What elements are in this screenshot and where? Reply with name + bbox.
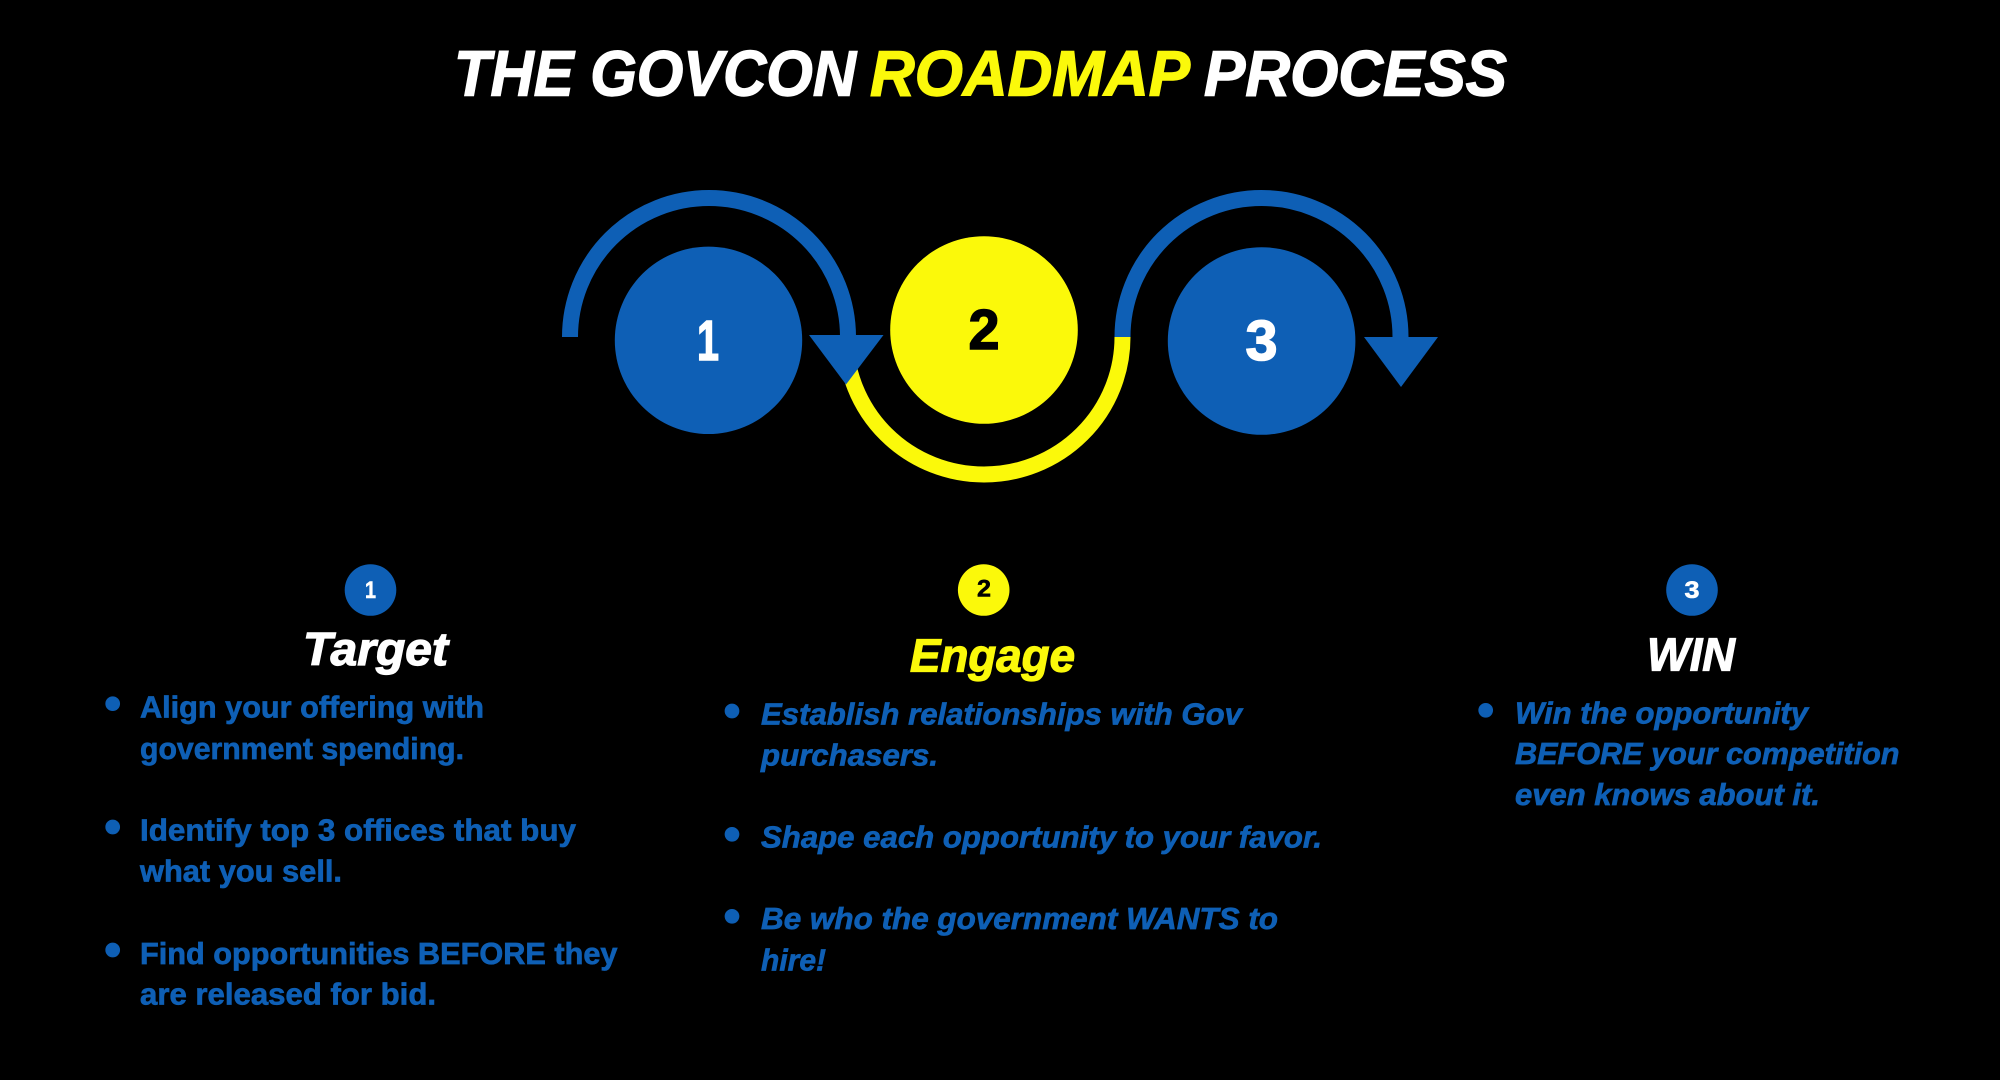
badge 3 [1666,564,1718,616]
bullet list: target: Identify top 3 offices that buy [140,813,577,848]
badge 2 [958,564,1010,616]
heading: target: Target [303,623,450,675]
step 2 circle: 2 [968,298,1000,362]
arc: yellow arc to step 3 [846,337,1122,474]
bullet list: engage: Establish relationships with Gov [761,696,1244,731]
title: ROADMAP [870,38,1190,110]
badge 2: 2 [977,576,991,602]
bullet list: win: even knows about it. [1515,777,1820,812]
arrow: step 3 onward [1122,198,1438,387]
bullet list: engage: Be who the government WANTS to [761,901,1278,936]
bullet list: target [106,690,618,1012]
bullet list: win: Win the opportunity [1515,695,1810,730]
step 1 circle: 1 [697,309,719,373]
step 2 circle [890,236,1078,424]
badge 1 [345,564,396,616]
bullet list: win [1479,695,1900,812]
heading: engage: Engage [910,630,1075,682]
bullet list: engage: Shape each opportunity to your favor. [761,819,1322,854]
bullet list: engage: hire! [761,943,826,978]
bullet list: target: government spending. [140,731,464,766]
title [454,38,1507,110]
process diagram [570,198,1438,474]
step 1 circle [615,247,802,434]
badge 1: 1 [365,577,376,604]
bullet list: engage [725,696,1322,978]
bullet list: target: are released for bid. [140,977,436,1012]
step 3 circle [1168,247,1355,435]
bullet list: engage: purchasers. [760,738,938,773]
title: PROCESS [1204,38,1507,110]
badge 3: 3 [1684,577,1700,604]
arrow: step 1 to step 2 [570,198,884,384]
title: THE GOVCON [454,38,858,110]
panel: target [106,564,618,1012]
bullet list: target: what you sell. [139,854,342,889]
bullet list: target: Find opportunities BEFORE they [140,936,618,971]
bullet list: win: BEFORE your competition [1515,736,1900,771]
panel: win [1479,564,1900,812]
heading: win: WIN [1647,629,1736,681]
panel: engage [725,564,1322,978]
bullet list: target: Align your offering with [140,690,484,725]
step 3 circle: 3 [1246,309,1278,373]
